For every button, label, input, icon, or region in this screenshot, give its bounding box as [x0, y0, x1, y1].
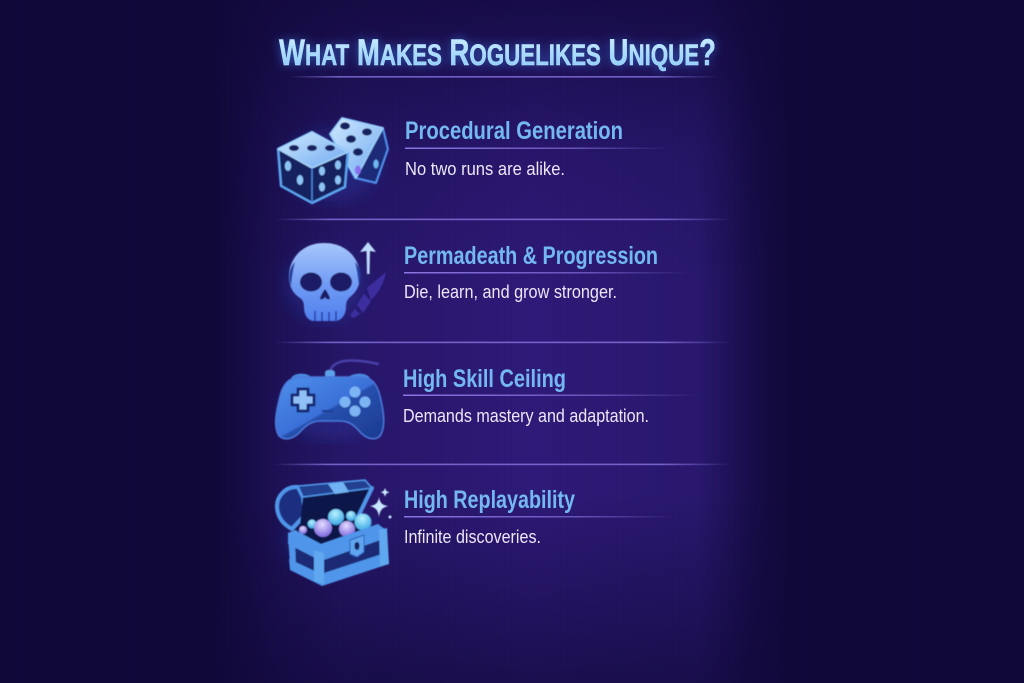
description: high skill ceiling: Demands mastery and adaptation. [403, 405, 649, 426]
panel: high skill ceiling [276, 360, 698, 440]
icon: dice [278, 118, 388, 203]
icon part: chest interior [288, 488, 380, 550]
title: WHAT MAKES ROGUELIKES UNIQUE? [279, 32, 716, 73]
heading: procedural generation: Procedural Generation [405, 117, 623, 145]
description: high replayability: Infinite discoveries. [404, 526, 541, 547]
description: permadeath and progression: Die, learn, and grow stronger. [404, 281, 617, 302]
icon part: gems [299, 526, 307, 534]
panel: procedural generation [278, 117, 670, 203]
heading: permadeath and progression: Permadeath & Progression [404, 242, 658, 270]
icon: treasure chest [277, 480, 392, 586]
title: WHAT MAKES ROGUELIKES UNIQUE? [279, 32, 716, 73]
icon part: chest body [288, 536, 321, 581]
icon: skull [283, 242, 386, 323]
icon part: sparkles [370, 497, 388, 517]
description: procedural generation: No two runs are alike. [405, 158, 565, 179]
icon part: lid side loop [277, 487, 305, 529]
heading: high skill ceiling: High Skill Ceiling [403, 365, 566, 393]
heading: high replayability: High Replayability [404, 486, 575, 514]
panel: high replayability [277, 480, 674, 586]
panel: permadeath and progression [283, 242, 689, 323]
icon: game controller [276, 360, 384, 440]
icon part: lid top strip [298, 480, 372, 497]
